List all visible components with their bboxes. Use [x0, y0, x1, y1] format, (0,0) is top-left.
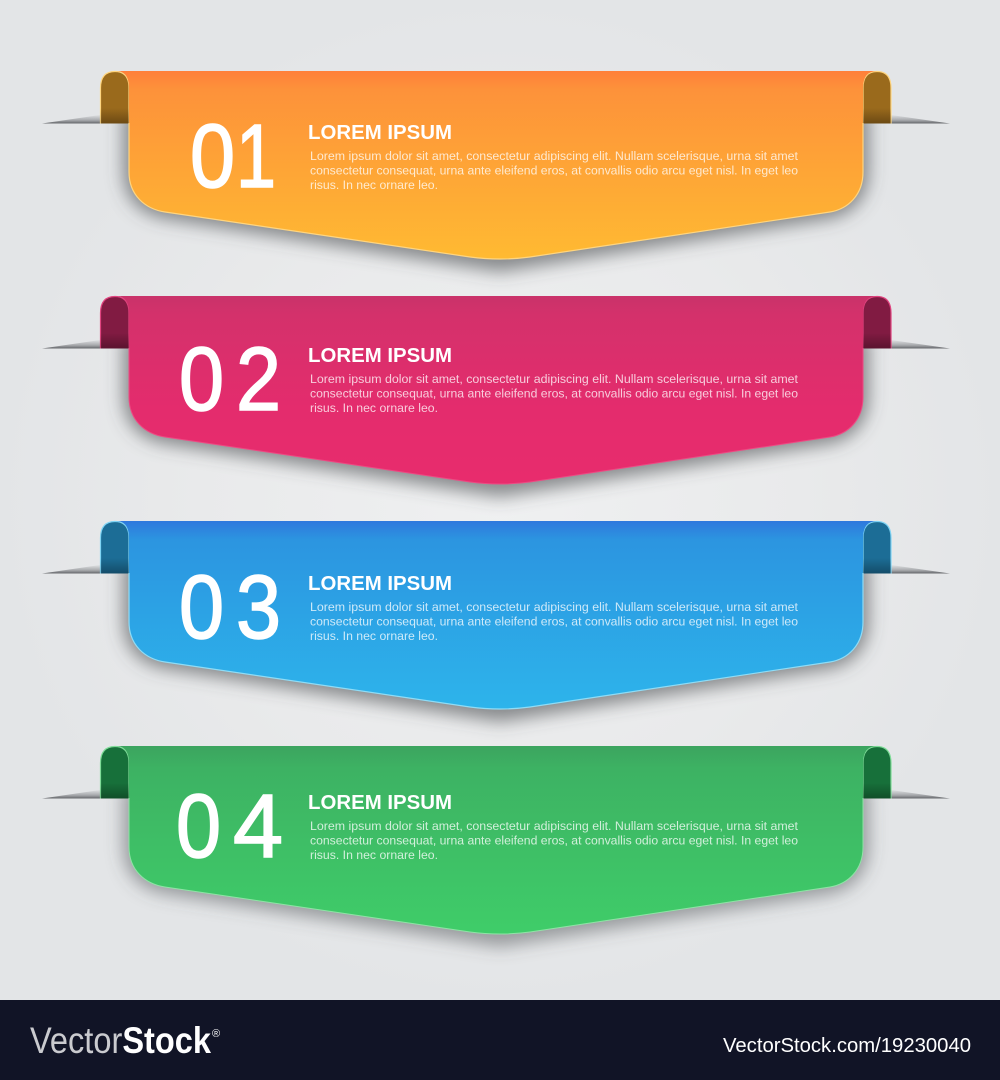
image id: VectorStock.com/19230040	[723, 1034, 971, 1057]
number: 0	[179, 557, 224, 658]
slit shadows	[42, 790, 950, 798]
body text: risus. In nec ornare leo.	[310, 629, 438, 643]
body text: consectetur consequat, urna ante eleifend eros, at convallis odio arcu eget nisl. In eget leo	[310, 834, 798, 848]
number: 0	[176, 776, 221, 877]
ribbon body	[116, 521, 877, 709]
ribbon body	[116, 746, 877, 934]
number: 1	[236, 106, 276, 207]
heading: LOREM IPSUM	[308, 345, 452, 367]
drop shadow	[123, 560, 869, 722]
heading: LOREM IPSUM	[308, 792, 452, 814]
number	[176, 776, 283, 877]
slit shadows	[42, 565, 950, 574]
number: 0	[190, 106, 235, 207]
banner 03	[42, 521, 950, 722]
body text: Lorem ipsum dolor sit amet, consectetur adipiscing elit. Nullam scelerisque, urna sit amet	[310, 372, 799, 386]
fold tabs	[100, 296, 891, 348]
number	[179, 557, 281, 658]
footer bar	[0, 1000, 1000, 1080]
ribbon body	[116, 71, 877, 259]
body text: risus. In nec ornare leo.	[310, 848, 438, 862]
body text: risus. In nec ornare leo.	[310, 401, 438, 415]
fold tabs	[100, 746, 891, 798]
number: 4	[233, 777, 283, 877]
drop shadow	[123, 110, 869, 272]
VectorStock logo: VectorStock	[30, 1020, 211, 1061]
body text: consectetur consequat, urna ante eleifend eros, at convallis odio arcu eget nisl. In eget leo	[310, 164, 798, 178]
slit shadows	[42, 340, 950, 348]
body text: risus. In nec ornare leo.	[310, 178, 438, 192]
body text: consectetur consequat, urna ante eleifend eros, at convallis odio arcu eget nisl. In eget leo	[310, 614, 798, 628]
body text: Lorem ipsum dolor sit amet, consectetur adipiscing elit. Nullam scelerisque, urna sit amet	[310, 149, 799, 163]
fold tabs	[100, 522, 891, 574]
banner 02	[42, 296, 950, 497]
number	[190, 106, 276, 207]
number	[179, 329, 281, 430]
body text: Lorem ipsum dolor sit amet, consectetur adipiscing elit. Nullam scelerisque, urna sit amet	[310, 819, 799, 833]
registered mark: ®	[212, 1028, 220, 1040]
body text: consectetur consequat, urna ante eleifend eros, at convallis odio arcu eget nisl. In eget leo	[310, 386, 798, 400]
number: 2	[236, 329, 281, 430]
body text: Lorem ipsum dolor sit amet, consectetur adipiscing elit. Nullam scelerisque, urna sit amet	[310, 600, 799, 614]
slit shadows	[42, 115, 950, 124]
heading: LOREM IPSUM	[308, 573, 452, 595]
number: 0	[179, 329, 224, 430]
drop shadow	[123, 335, 869, 497]
banner 01	[42, 71, 950, 272]
drop shadow	[123, 785, 869, 947]
heading: LOREM IPSUM	[308, 122, 452, 144]
number: 3	[236, 557, 281, 658]
ribbon body	[116, 296, 877, 484]
banner 04	[42, 746, 950, 947]
fold tabs	[100, 72, 891, 124]
